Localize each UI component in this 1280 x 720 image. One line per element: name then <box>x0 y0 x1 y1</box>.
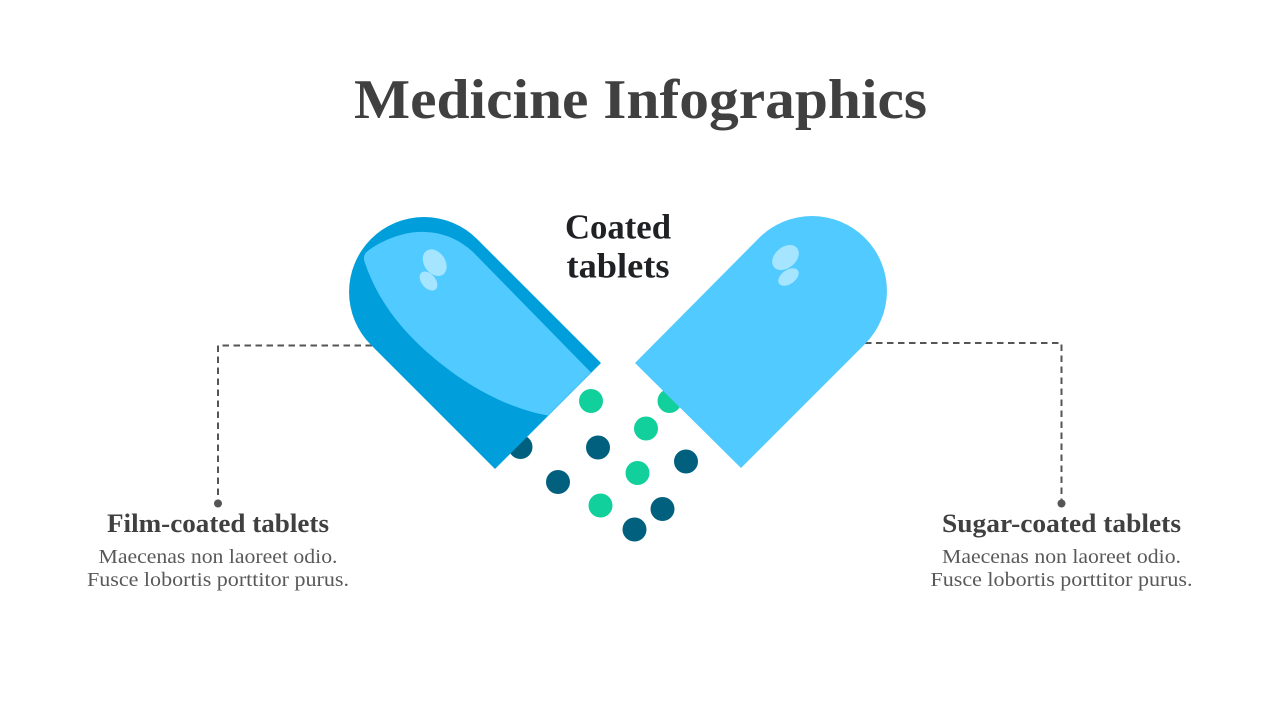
center heading <box>565 208 672 286</box>
text block: sugar-coated tablets: Maecenas non laoreet odio. <box>942 546 1181 568</box>
connector: sugar-coated <box>865 343 1066 508</box>
text block: film-coated tablets: Fusce lobortis porttitor purus. <box>87 569 349 591</box>
falling granules <box>508 389 698 542</box>
text block: sugar-coated tablets: Sugar-coated tablets <box>942 509 1181 538</box>
title: Medicine Infographics <box>354 69 927 131</box>
text block: film-coated tablets <box>87 509 349 591</box>
center heading: Coated <box>565 208 672 246</box>
connector: film-coated <box>214 346 372 508</box>
capsule half: right <box>635 216 887 468</box>
text block: film-coated tablets: Film-coated tablets <box>107 509 329 538</box>
text block: sugar-coated tablets: Fusce lobortis porttitor purus. <box>930 569 1192 591</box>
text block: sugar-coated tablets <box>930 509 1192 591</box>
center heading: tablets <box>566 246 670 286</box>
text block: film-coated tablets: Maecenas non laoreet odio. <box>98 546 338 568</box>
capsule half: left, coated <box>349 217 601 469</box>
